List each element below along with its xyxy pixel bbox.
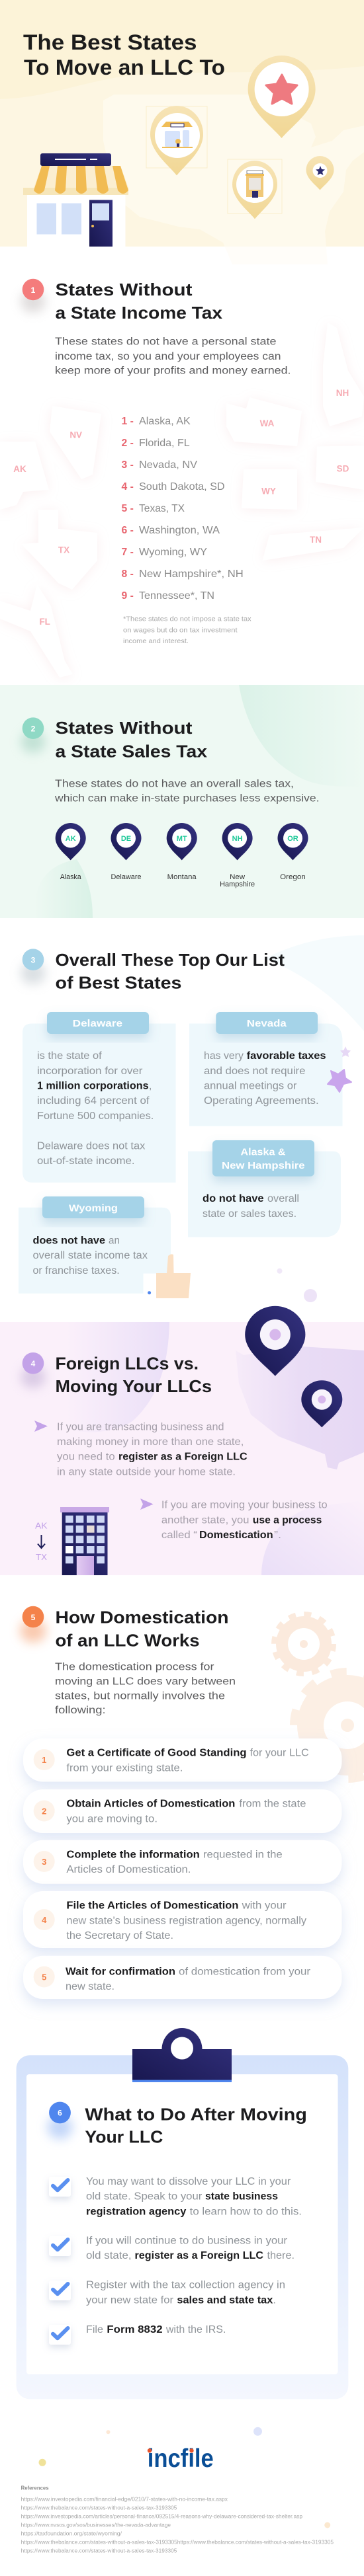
card: Nevada [189,1012,343,1126]
state list: South Dakota, SD [139,481,225,492]
card: Wyoming: Wyoming [69,1203,118,1214]
decorative dots [277,1268,317,1302]
panel: foreign LLCs vs moving [0,1306,364,1575]
heading: a State Income Tax [56,303,223,323]
text: foreign LLC: register as a Foreign LLC [118,1452,248,1463]
checklist item 3: Register with the tax collection agency in [86,2280,285,2291]
step 1: Get a Certificate of Good Standing [66,1747,247,1758]
illustration: building [60,1507,109,1575]
heading: of an LLC Works [56,1631,200,1651]
icon: small star pin [306,156,334,190]
icon: Oregon pin: Oregon [280,873,306,881]
checklist item 1: old state. Speak to your [86,2191,202,2203]
panel: states without income tax [0,279,364,678]
text: foreign LLC: in any state outside your home state. [57,1466,236,1477]
number badge 6 [48,2102,73,2139]
card: Delaware: is the state of [37,1050,102,1062]
number badge 2: 2 [31,724,36,734]
number badge 3 [21,949,46,984]
step 5: new state. [66,1981,114,1992]
state list [122,416,244,602]
card: Wyoming: or franchise taxes. [33,1265,120,1276]
intro text [54,779,320,804]
step 5: 5 [42,1972,46,1982]
number badge 5 [20,1606,46,1643]
icon: Montana pin: Montana [167,873,197,881]
state list: Florida, FL [139,438,190,449]
step 1: from your existing state. [66,1762,183,1774]
icon: Alaska pin: AK [66,835,76,843]
icon: New Hampshire pin: Hampshire [220,880,255,888]
checklist item 1 [49,2176,302,2217]
references: References [21,2485,49,2491]
heading [56,1608,229,1651]
number badge 4 [21,1352,46,1388]
checklist item 2: old state, [86,2250,132,2261]
number badge 1 [21,279,46,313]
step 3: Complete the information [66,1850,200,1861]
state labels: WA [260,418,275,428]
checklist item 4 [49,2324,226,2345]
icon: thumbs up [143,1254,191,1300]
text: domestication [161,1500,328,1541]
arrow bullet [140,1499,154,1510]
step 4: File the Articles of Domestication [66,1900,238,1912]
checklist item 1: registration agency [86,2206,187,2217]
checklist item 4: File [86,2324,103,2335]
footnote: *These states do not impose a state tax [123,615,251,623]
step 3: Articles of Domestication. [66,1864,191,1875]
checklist item 3 [49,2280,285,2306]
text: domestication: Domestication [199,1530,273,1541]
step 2: 2 [42,1806,46,1816]
state list: 6 - [122,525,134,536]
icon: shop pin [146,106,207,175]
decorative footer dots [38,2427,330,2528]
step 2: you are moving to. [66,1814,158,1825]
step 2 [23,1789,341,1833]
card: Delaware: , [149,1081,152,1092]
card: Alaska and New Hampshire: overall [267,1193,299,1204]
arrow bullet [34,1421,48,1432]
text: domestication: ”. [274,1530,281,1541]
card: Delaware: Delaware [73,1018,122,1029]
checklist item 1: state business [205,2191,278,2203]
number badge 5: 5 [31,1613,36,1622]
checklist item 4: with the IRS. [165,2324,226,2335]
card: Delaware: including 64 percent of [37,1095,150,1107]
heading: Overall These Top Our List [56,950,285,970]
icon: Montana pin [167,823,197,881]
intro text: The domestication process for [55,1661,214,1672]
state list: Tennessee*, TN [139,590,214,602]
card: Nevada: favorable taxes [247,1050,326,1062]
step 1: for your LLC [250,1747,309,1758]
state list: 2 - [122,438,134,449]
title: The Best States [23,30,197,54]
state labels [13,388,349,627]
text: domestication: another state, you [161,1514,249,1526]
icon: purple stars [328,1046,351,1092]
text: domestication: called “ [161,1530,197,1541]
references: https://www.investopedia.com/articles/personal-finance/092515/4-reasons-why-delaware-considered-tax-shelter.asp [21,2513,303,2519]
AK to TX move label: AK [35,1521,48,1531]
references: https://www.thebalance.com/states-without-a-sales-tax-3193305 [21,2505,177,2511]
heading [56,950,285,993]
icon: Alaska pin: Alaska [60,873,82,881]
state labels: TX [58,545,69,555]
icon: small location pin [301,1380,342,1427]
panel: how domestication works [20,1606,364,1999]
state labels: AK [13,464,26,474]
state list: 5 - [122,503,134,514]
state list: 7 - [122,547,134,558]
step 4: the Secretary of State. [66,1930,173,1941]
icon: New Hampshire pin: NH [232,835,243,843]
footnote: income and interest. [123,637,189,645]
intro text [55,336,291,377]
references: https://www.nvsos.gov/sos/businesses/the-nevada-advantage [21,2522,171,2528]
heading: States Without [56,280,193,299]
state list: New Hampshire*, NH [139,568,244,580]
icon: Montana pin: MT [177,835,187,843]
step 3: requested in the [203,1850,283,1861]
panel: hero [0,0,364,268]
text: domestication: use a process [253,1514,322,1526]
step 4 [23,1891,341,1948]
footnote [123,615,251,645]
panel: states without sales tax [0,685,364,918]
heading: States Without [56,718,193,738]
checklist item 2: If you will continue to do business in your [86,2235,287,2246]
card: Nevada: annual meetings or [204,1081,296,1092]
step 3 [23,1840,341,1884]
icon: Delaware pin: DE [121,835,131,843]
number badge 3: 3 [31,956,36,965]
state labels: FL [39,617,50,627]
step 2: Obtain Articles of Domestication [66,1799,235,1810]
clipboard clip [132,2028,232,2082]
heading [56,280,223,323]
card: Delaware: Fortune 500 companies. [37,1111,154,1122]
references: https://www.investopedia.com/financial-edge/0210/7-states-with-no-income-tax.aspx [21,2496,228,2502]
card: Alaska and New Hampshire: do not have [203,1193,264,1204]
card: Delaware: incorporation for over [37,1066,142,1077]
hero map of the United States [103,95,364,264]
state shapes [0,323,364,678]
icon: office building pin [228,159,282,219]
references: https://www.thebalance.com/states-without-a-sales-tax-3193305 [21,2548,177,2554]
card: Delaware: out-of-state income. [37,1155,135,1167]
icon: Delaware pin: Delaware [111,873,142,881]
state list: 4 - [122,481,134,492]
card: Nevada: Nevada [247,1018,287,1029]
state list: 3 - [122,459,134,471]
state list: Alaska, AK [139,416,191,427]
state labels: SD [337,464,349,473]
icon: Delaware pin [111,823,142,881]
text: domestication: If you are moving your business to [161,1500,328,1511]
intro text: states, but normally involves the [55,1690,225,1701]
heading: Moving Your LLCs [56,1376,212,1396]
state labels: NV [69,430,82,440]
intro text: following: [55,1705,106,1716]
step 2: from the state [239,1799,306,1810]
icon: New Hampshire pin: New [230,873,245,881]
heading: Your LLC [85,2127,163,2147]
checklist item 2: there. [267,2250,295,2261]
icon: large location pin [245,1306,305,1376]
icon: Oregon pin: OR [287,835,298,843]
state list: Texas, TX [139,503,185,514]
intro text: These states do not have an overall sales tax, [55,779,294,790]
logo: incfile: incfile [148,2444,214,2473]
heading: Foreign LLCs vs. [56,1354,199,1374]
intro text: moving an LLC does vary between [55,1676,236,1687]
state labels: WY [261,487,276,496]
intro text: These states do not have a personal state [55,336,277,348]
card: Delaware: Delaware does not tax [37,1140,146,1151]
title: To Move an LLC To [24,56,225,79]
card: Alaska and New Hampshire: New Hampshire [222,1160,305,1171]
intro text: income tax, so you and your employees can [55,351,281,362]
state list: 1 - [122,416,134,427]
heading [85,2104,307,2147]
intro text: keep more of your profits and money earned. [55,366,291,377]
icon: Alaska pin [56,823,86,881]
checklist item 3: your new state for [86,2294,173,2306]
references: https://www.thebalance.com/states-without-a-sales-tax-3193305https://www.thebalance.com/states-without-a-sales-tax-3193305 [21,2539,334,2545]
icon: gears [274,1614,364,1779]
AK to TX move label: TX [36,1552,47,1562]
card: Alaska and New Hampshire: Alaska & [241,1146,286,1158]
icon: New Hampshire pin [220,823,255,888]
card: Wyoming: overall state income tax [33,1250,148,1261]
checklist item 1: You may want to dissolve your LLC in your [86,2176,291,2187]
number badge 2 [21,717,46,753]
heading: of Best States [56,973,181,993]
card: Wyoming [19,1196,171,1294]
step 3: 3 [42,1857,46,1867]
step 1 [23,1738,341,1781]
icon: Oregon pin [278,823,308,881]
state list: Wyoming, WY [139,547,207,558]
checklist item 1: to learn how to do this. [190,2206,302,2217]
title [23,30,225,79]
text: foreign LLC: making money in more than one state, [57,1436,244,1448]
heading [56,718,208,761]
text: foreign LLC [57,1421,248,1477]
state list: Nevada, NV [139,459,197,471]
heading [56,1354,212,1396]
checklist item 3: . [273,2294,276,2306]
references: https://taxfoundation.org/state/wyoming/ [21,2530,122,2536]
step 5 [23,1956,341,1999]
state labels: NH [336,388,349,398]
step 4: 4 [42,1915,47,1925]
step 5: Wait for confirmation [66,1966,175,1977]
number badge 4: 4 [31,1359,36,1368]
heading: a State Sales Tax [56,742,208,761]
text: foreign LLC: If you are transacting business and [57,1421,224,1432]
state list: 9 - [122,590,134,602]
references [21,2485,334,2554]
step 1: 1 [42,1755,46,1765]
checklist item 4: Form 8832 [107,2324,163,2335]
checklist item 2: register as a Foreign LLC [135,2250,263,2261]
intro text: which can make in-state purchases less expensive. [54,793,320,804]
state labels: TN [310,535,322,545]
heading: How Domestication [56,1608,229,1627]
footnote: on wages but do on tax investment [123,626,238,634]
card: Nevada: has very [204,1050,244,1062]
card: Nevada: Operating Agreements. [204,1095,319,1107]
step 4: new state’s business registration agency, normally [66,1916,306,1926]
intro text [55,1661,236,1716]
checklist item 2 [49,2235,295,2261]
card: Wyoming: an [109,1235,120,1246]
AK to TX move label [35,1521,48,1562]
number badge 1: 1 [31,286,36,295]
state list: Washington, WA [139,525,220,536]
illustration: storefront [23,153,128,247]
step 5: of domestication from your [179,1966,310,1977]
state list: 8 - [122,568,134,580]
card: Nevada: and does not require [204,1066,305,1077]
card: Alaska and New Hampshire [188,1140,341,1237]
text: foreign LLC: you need to [57,1452,115,1463]
checklist item 3: sales and state tax [177,2294,273,2306]
card: Delaware [23,1012,176,1183]
card: Wyoming: does not have [33,1235,105,1246]
icon: large star pin [248,56,316,138]
heading: What to Do After Moving [85,2104,307,2124]
card: Delaware: 1 million corporations [37,1081,149,1092]
step 4: with your [242,1900,287,1912]
number badge 6: 6 [58,2109,62,2118]
card: Alaska and New Hampshire: state or sales taxes. [203,1208,296,1220]
panel: clipboard, what to do after moving [17,2028,348,2399]
background US map [236,1347,364,1469]
panel: best states overall [19,935,364,1302]
